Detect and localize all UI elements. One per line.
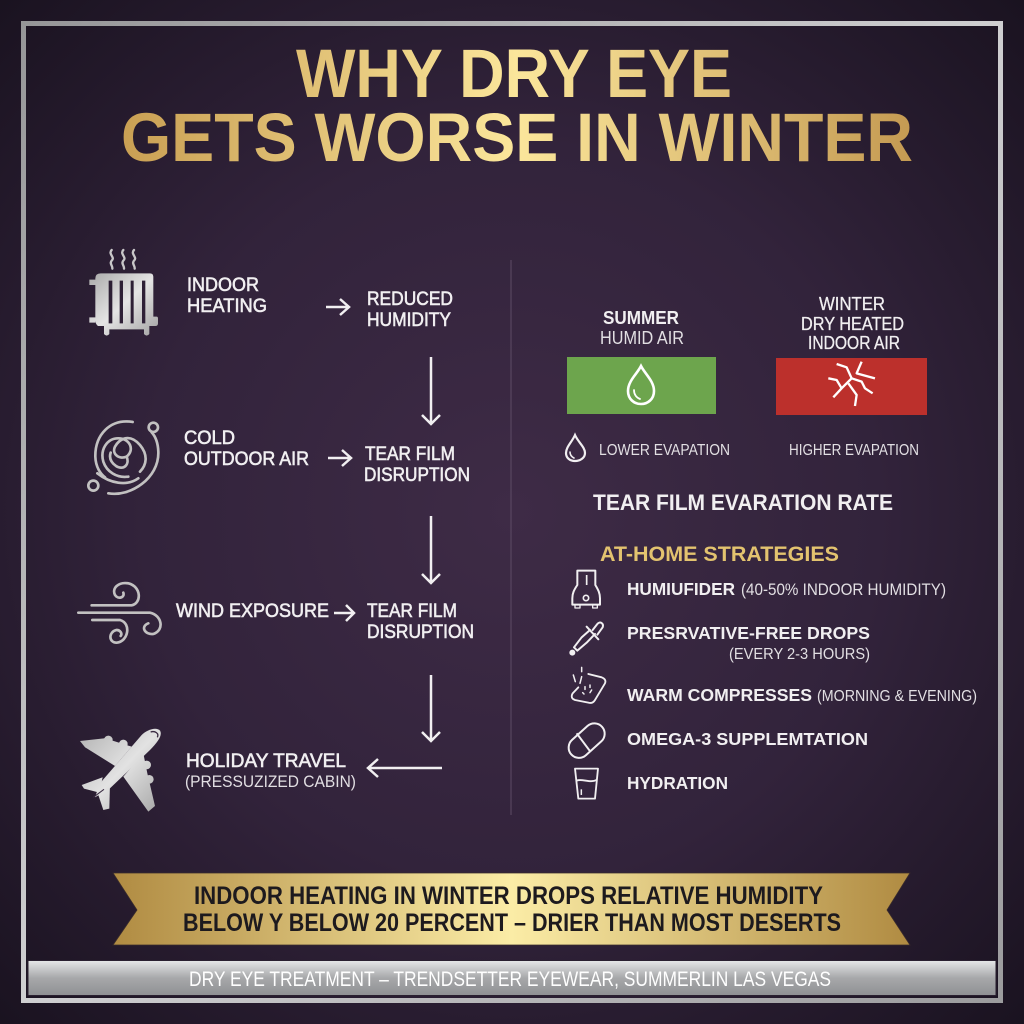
text: hydration: HYDRATION <box>627 773 728 793</box>
icon: dropper <box>570 622 603 655</box>
text: humidifier: HUMIUFIDER <box>627 579 735 599</box>
arrow: left <box>368 759 442 777</box>
label: tear film disruption 2: TEAR FILM <box>367 600 457 622</box>
icon: cold air spiral <box>88 421 158 494</box>
label: tear film disruption 2 <box>367 600 474 643</box>
label: winter dry heated indoor air: DRY HEATED <box>801 314 904 334</box>
icon: omega-3 pill <box>564 719 609 762</box>
label: holiday travel: (PRESSUZIZED CABIN) <box>185 772 356 791</box>
label: holiday travel <box>185 750 356 791</box>
arrow: cold air to disruption <box>328 450 351 466</box>
footer bar: DRY EYE TREATMENT – TRENDSETTER EYEWEAR, SUMMERLIN LAS VEGAS <box>189 968 831 991</box>
label: winter dry heated indoor air: INDOOR AIR <box>808 333 900 353</box>
arrow: heating to humidity <box>326 299 349 315</box>
winter red bar <box>776 358 927 415</box>
label: cold outdoor air: COLD <box>184 427 235 449</box>
icon: small drop <box>566 435 585 461</box>
panel: winter causes flow <box>78 250 474 812</box>
heading: at-home strategies: AT-HOME STRATEGIES <box>600 543 839 566</box>
label: tear film disruption 1 <box>364 443 470 486</box>
label: reduced humidity: REDUCED <box>367 288 453 310</box>
label: lower evaporation: LOWER EVAPATION <box>599 442 730 459</box>
label: summer humid air: SUMMER <box>603 308 679 328</box>
label: reduced humidity: HUMIDITY <box>367 309 451 331</box>
icon: airplane <box>80 729 161 812</box>
arrow: wind to disruption <box>334 605 354 621</box>
arrow: down 3 <box>422 675 440 741</box>
panel: at-home strategies <box>564 543 977 799</box>
icon: water drop <box>628 366 654 404</box>
label: indoor heating: HEATING <box>187 295 267 317</box>
title <box>121 35 913 176</box>
text: warm compresses: (MORNING & EVENING) <box>817 688 977 705</box>
icon: radiator <box>89 250 158 336</box>
text: omega-3: OMEGA-3 SUPPLEMTATION <box>627 729 868 749</box>
icon: warm compress <box>572 667 605 703</box>
footer bar <box>28 960 996 996</box>
label: tear film disruption 1: DISRUPTION <box>364 464 470 486</box>
label: wind exposure: WIND EXPOSURE <box>176 600 329 622</box>
title: WHY DRY EYE <box>296 35 732 112</box>
text: warm compresses <box>627 685 977 705</box>
panel: summer vs winter comparison <box>566 294 927 515</box>
icon: wind <box>78 583 161 643</box>
label: indoor heating <box>187 274 267 317</box>
label: reduced humidity <box>367 288 453 331</box>
text: humidifier <box>627 579 946 599</box>
icon: humidifier <box>572 571 600 608</box>
summer green bar <box>567 357 716 414</box>
gold ribbon callout: BELOW Y BELOW 20 PERCENT – DRIER THAN MOST DESERTS <box>183 909 841 937</box>
label: winter dry heated indoor air: WINTER <box>819 294 885 314</box>
text: warm compresses: WARM COMPRESSES <box>627 685 812 705</box>
label: tear film disruption 1: TEAR FILM <box>365 443 455 465</box>
label: summer humid air <box>600 308 684 348</box>
label: summer humid air: HUMID AIR <box>600 328 684 348</box>
label: winter dry heated indoor air <box>801 294 904 353</box>
label: holiday travel: HOLIDAY TRAVEL <box>186 750 346 772</box>
arrow: down 2 <box>422 516 440 583</box>
label: higher evaporation: HIGHER EVAPATION <box>789 442 919 459</box>
label: indoor heating: INDOOR <box>187 274 259 296</box>
icon: glass of water <box>575 769 598 799</box>
text: preservative-free drops: PRESRVATIVE-FREE DROPS <box>627 623 870 643</box>
arrow: down 1 <box>422 357 440 424</box>
label: cold outdoor air <box>184 427 309 470</box>
text: humidifier: (40-50% INDOOR HUMIDITY) <box>741 580 946 599</box>
gold ribbon callout <box>113 873 910 945</box>
text: preservative-free drops <box>627 623 870 663</box>
title: GETS WORSE IN WINTER <box>121 99 913 176</box>
gold ribbon callout: INDOOR HEATING IN WINTER DROPS RELATIVE HUMIDITY <box>194 882 823 910</box>
text: preservative-free drops: (EVERY 2-3 HOURS) <box>729 646 870 663</box>
label: tear film disruption 2: DISRUPTION <box>367 621 474 643</box>
icon: cracks <box>828 362 875 406</box>
divider <box>510 260 512 815</box>
heading: tear film evaporation rate: TEAR FILM EVARATION RATE <box>593 490 893 515</box>
label: cold outdoor air: OUTDOOR AIR <box>184 448 309 470</box>
